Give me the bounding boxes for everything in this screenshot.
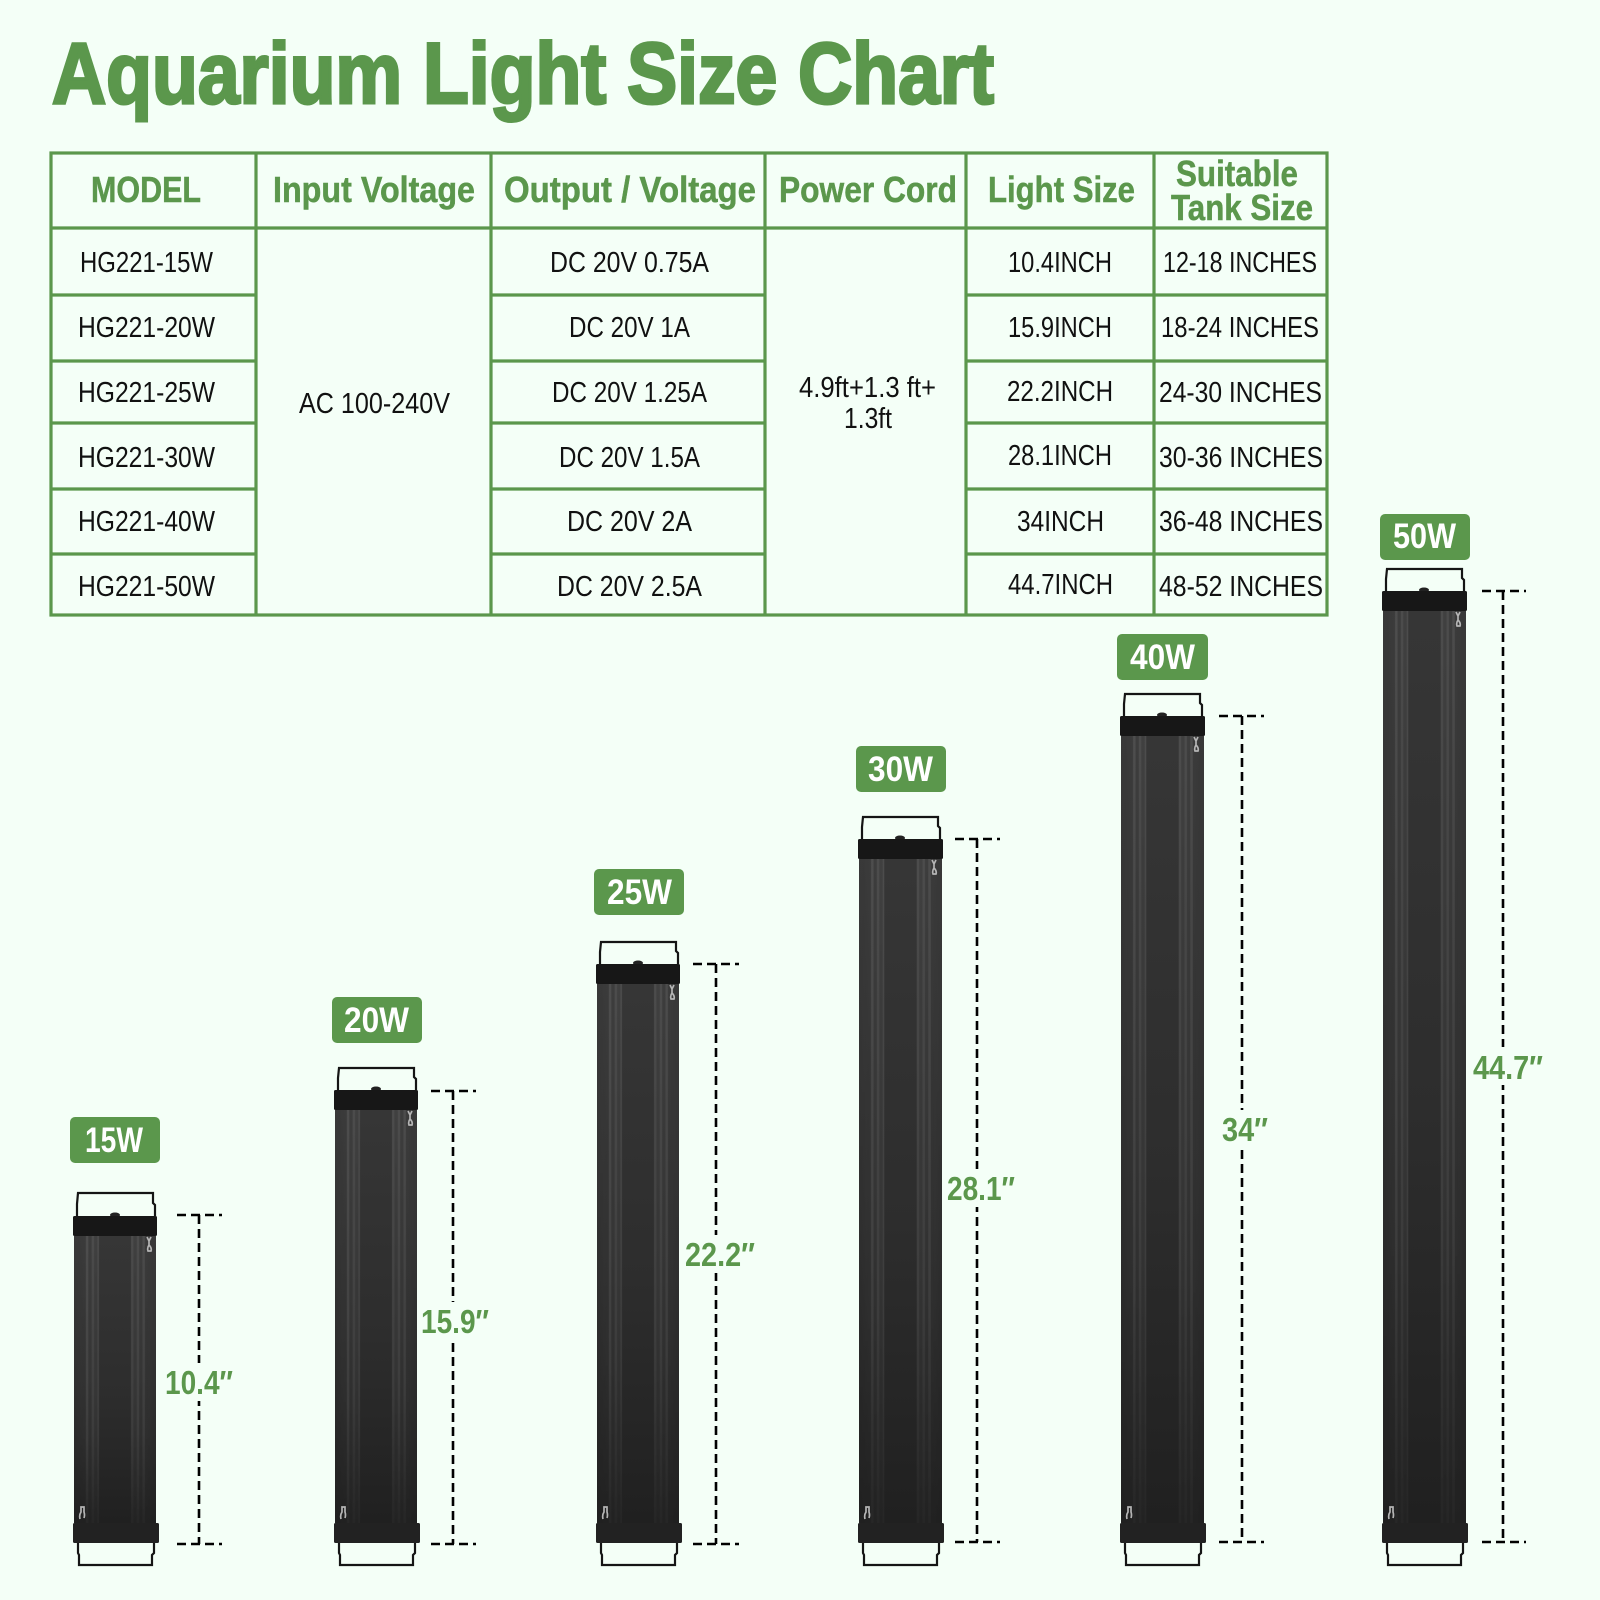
dimension line: 22.2 inch [693,964,739,1544]
column: power cord: 1.3ft [844,403,892,435]
column: model: HG221-20W [78,312,216,344]
column: model: HG221-25W [78,377,216,409]
column: suitable tank size: 36-48 INCHES [1159,506,1323,538]
column: model: HG221-15W [80,247,214,279]
column: suitable tank size: 24-30 INCHES [1159,377,1322,409]
badge: 15W [70,1117,160,1163]
light: 15W [70,1117,234,1565]
column: power cord: 4.9ft+1.3 ft+ [799,372,936,404]
column: light size: 15.9INCH [1008,312,1112,344]
column: output voltage: DC 20V 1A [569,312,691,344]
table header row [91,153,1313,228]
light fixture: 40W [1120,694,1206,1565]
dimension label: 44.7 inch: 44.7″ [1473,1049,1543,1086]
light fixture: 50W [1382,569,1468,1565]
light fixture: 25W [596,942,682,1565]
column: output voltage: DC 20V 1.5A [559,442,701,474]
light fixture: 20W [334,1068,420,1565]
badge: 50W: 50W [1393,517,1456,556]
light: 40W [1117,634,1269,1565]
column: input voltage: AC 100-240V [299,388,451,420]
badge: 25W: 25W [607,873,672,912]
column: output voltage: DC 20V 1.25A [552,377,708,409]
column: light size: 22.2INCH [1007,376,1113,408]
column: output voltage: DC 20V 0.75A [550,247,710,279]
table header row: Input Voltage [273,169,475,210]
badge: 30W: 30W [868,750,933,789]
light fixture: 15W [73,1193,159,1565]
column: model: HG221-50W [78,571,216,603]
badge: 40W: 40W [1130,638,1195,677]
column: output voltage: DC 20V 2.5A [557,571,703,603]
badge: 15W: 15W [85,1121,143,1160]
column: light size: 10.4INCH [1008,247,1112,279]
dimension line: 15.9 inch [431,1091,476,1544]
column: light size: 44.7INCH [1008,569,1113,601]
table header row: Light Size [988,169,1135,210]
table header row: Power Cord [779,169,957,210]
column: model: HG221-40W [78,506,216,538]
badge: 20W [332,997,422,1043]
dimension label: 28.1 inch: 28.1″ [947,1170,1015,1207]
dimension label: 10.4 inch: 10.4″ [165,1364,233,1401]
light: 50W [1380,514,1544,1565]
column: output voltage [550,247,710,603]
table header row: Suitable [1176,153,1298,194]
column: suitable tank size: 18-24 INCHES [1161,312,1319,344]
column: suitable tank size [1159,247,1323,603]
badge: 25W [594,869,684,915]
table header row: Tank Size [1171,187,1313,228]
column: light size: 34INCH [1017,506,1104,538]
spec table [51,153,1327,615]
light: 30W [856,746,1016,1565]
column: power cord [799,372,936,435]
dimension line: 34 inch [1219,716,1264,1542]
column: light size: 28.1INCH [1008,440,1112,472]
badge: 30W [856,746,946,792]
column: suitable tank size: 12-18 INCHES [1163,247,1317,279]
badge: 50W [1380,514,1470,560]
table header row: MODEL [91,169,201,210]
table header row: Output / Voltage [504,169,756,210]
column: model [78,247,216,603]
light: 25W [594,869,756,1565]
dimension line: 44.7 inch [1482,591,1526,1542]
dimension line: 28.1 inch [955,839,1000,1542]
column: output voltage: DC 20V 2A [567,506,693,538]
column: suitable tank size: 48-52 INCHES [1159,571,1323,603]
badge: 40W [1117,634,1208,680]
dimension label: 22.2 inch: 22.2″ [685,1236,755,1273]
column: suitable tank size: 30-36 INCHES [1159,442,1323,474]
dimension label: 15.9 inch: 15.9″ [421,1303,489,1340]
title: Aquarium Light Size Chart [52,26,994,122]
column: light size [1007,247,1113,601]
dimension label: 34 inch: 34″ [1222,1111,1268,1148]
table grid [51,153,1327,615]
badge: 20W: 20W [344,1001,409,1040]
light fixture: 30W [858,817,944,1565]
light: 20W [332,997,490,1565]
column: model: HG221-30W [78,442,216,474]
dimension line: 10.4 inch [177,1215,222,1544]
